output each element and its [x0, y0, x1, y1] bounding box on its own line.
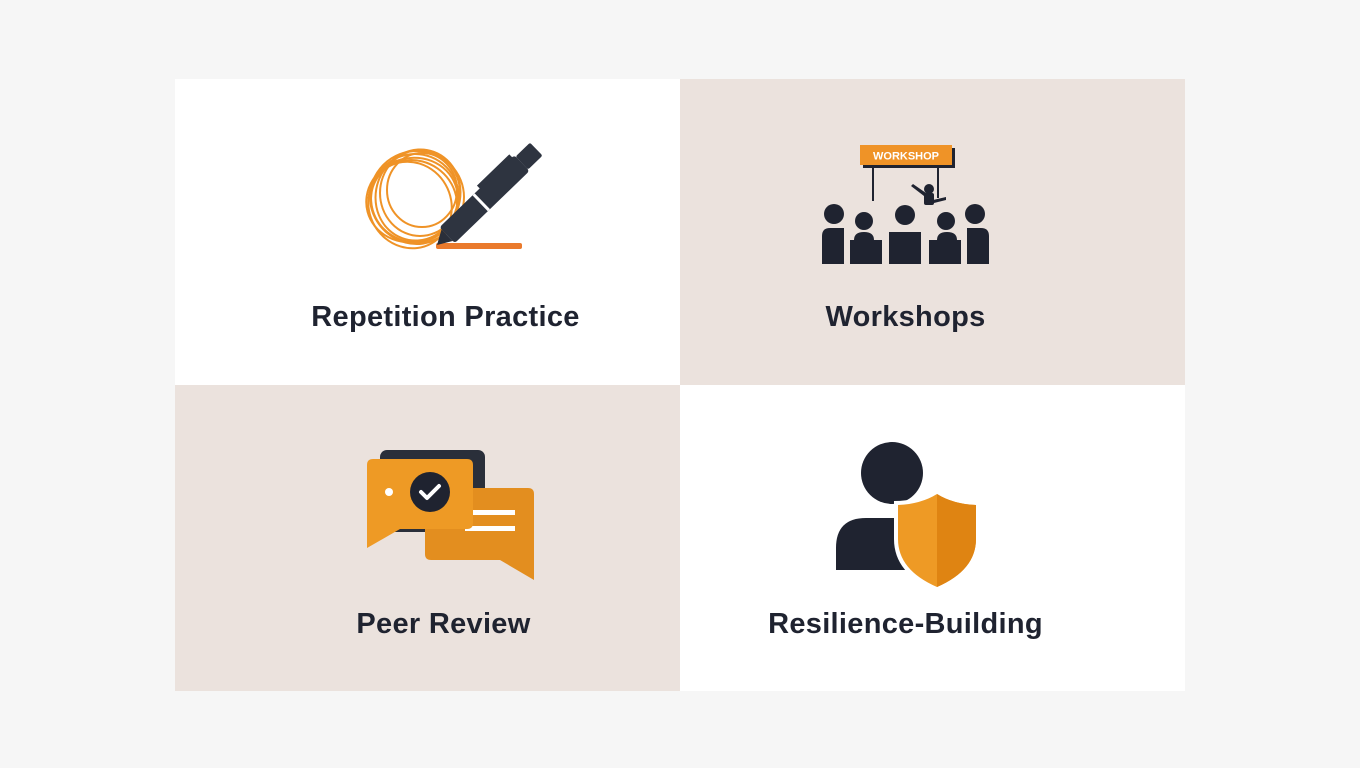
- panel: peer review: [175, 385, 680, 691]
- heading: Peer Review: Peer Review: [356, 608, 531, 640]
- panel: resilience building: [680, 385, 1185, 691]
- heading: Repetition Practice: Repetition Practice: [311, 301, 580, 333]
- icon: person with shield: [836, 442, 976, 587]
- heading: Resilience-Building: Resilience-Building: [768, 608, 1043, 640]
- icon: chat bubbles: [367, 450, 534, 580]
- heading: Workshops: Workshops: [825, 301, 986, 333]
- panel: workshops: [680, 79, 1185, 385]
- icon: workshop group: WORKSHOP: [873, 150, 939, 162]
- icon: scribble and pen: [365, 143, 542, 250]
- panel: repetition practice: [175, 79, 680, 385]
- icon: workshop group: [822, 145, 989, 264]
